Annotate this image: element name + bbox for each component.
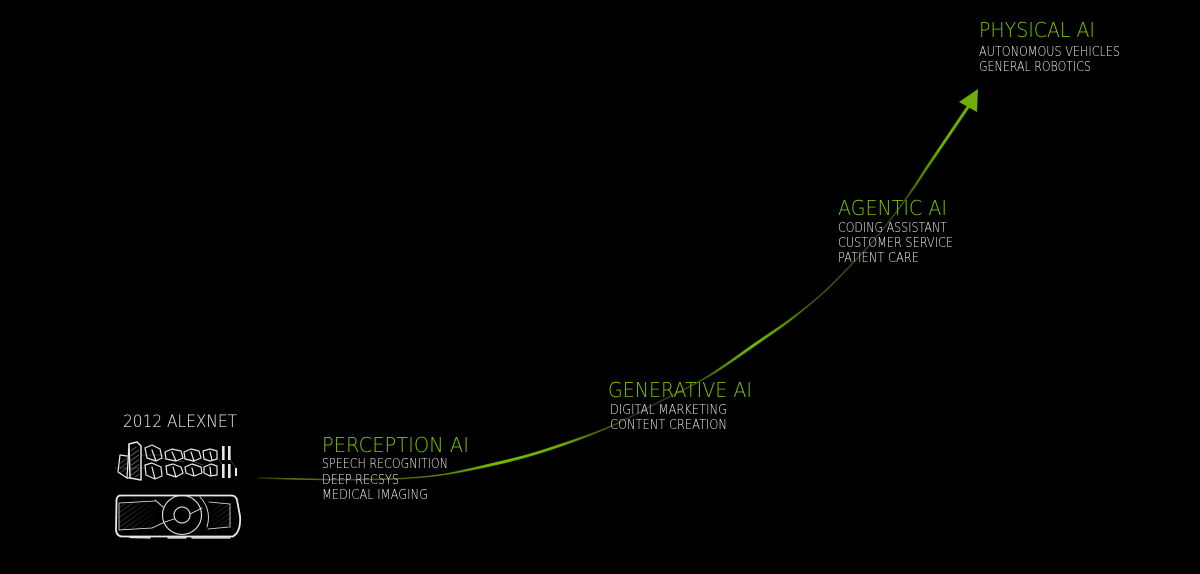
text block: Agentic AI: PATIENT CARE xyxy=(838,250,919,266)
text block: Generative AI: DIGITAL MARKETING xyxy=(610,402,727,418)
text block: Perception AI: PERCEPTION AI xyxy=(322,433,469,457)
text block: Physical AI: PHYSICAL AI xyxy=(979,18,1095,42)
text block: Generative AI: GENERATIVE AI xyxy=(608,378,752,402)
text block: Physical AI: AUTONOMOUS VEHICLES xyxy=(979,44,1120,60)
text block: Physical AI xyxy=(979,18,1120,75)
text block: Agentic AI: CODING ASSISTANT xyxy=(838,220,947,236)
text block: Perception AI: DEEP RECSYS xyxy=(322,472,399,488)
icon: GPU graphics card sketch xyxy=(116,496,240,538)
text block: Agentic AI: AGENTIC AI xyxy=(838,196,947,220)
text block: Perception AI: MEDICAL IMAGING xyxy=(322,487,428,503)
text block: Agentic AI xyxy=(838,196,953,266)
growth diagram xyxy=(114,22,1120,539)
text block: Generative AI xyxy=(608,378,752,433)
icon: AlexNet neural network sketch xyxy=(115,442,237,480)
text block: Perception AI xyxy=(322,433,469,503)
arrowhead xyxy=(959,89,978,112)
text block: Generative AI: CONTENT CREATION xyxy=(610,417,727,433)
title: 2012 AlexNet: 2012 ALEXNET xyxy=(123,412,238,432)
text block: Physical AI: GENERAL ROBOTICS xyxy=(979,59,1091,75)
text block: Agentic AI: CUSTOMER SERVICE xyxy=(838,235,953,251)
growth curve arrow xyxy=(258,89,978,480)
text block: Perception AI: SPEECH RECOGNITION xyxy=(322,456,448,472)
